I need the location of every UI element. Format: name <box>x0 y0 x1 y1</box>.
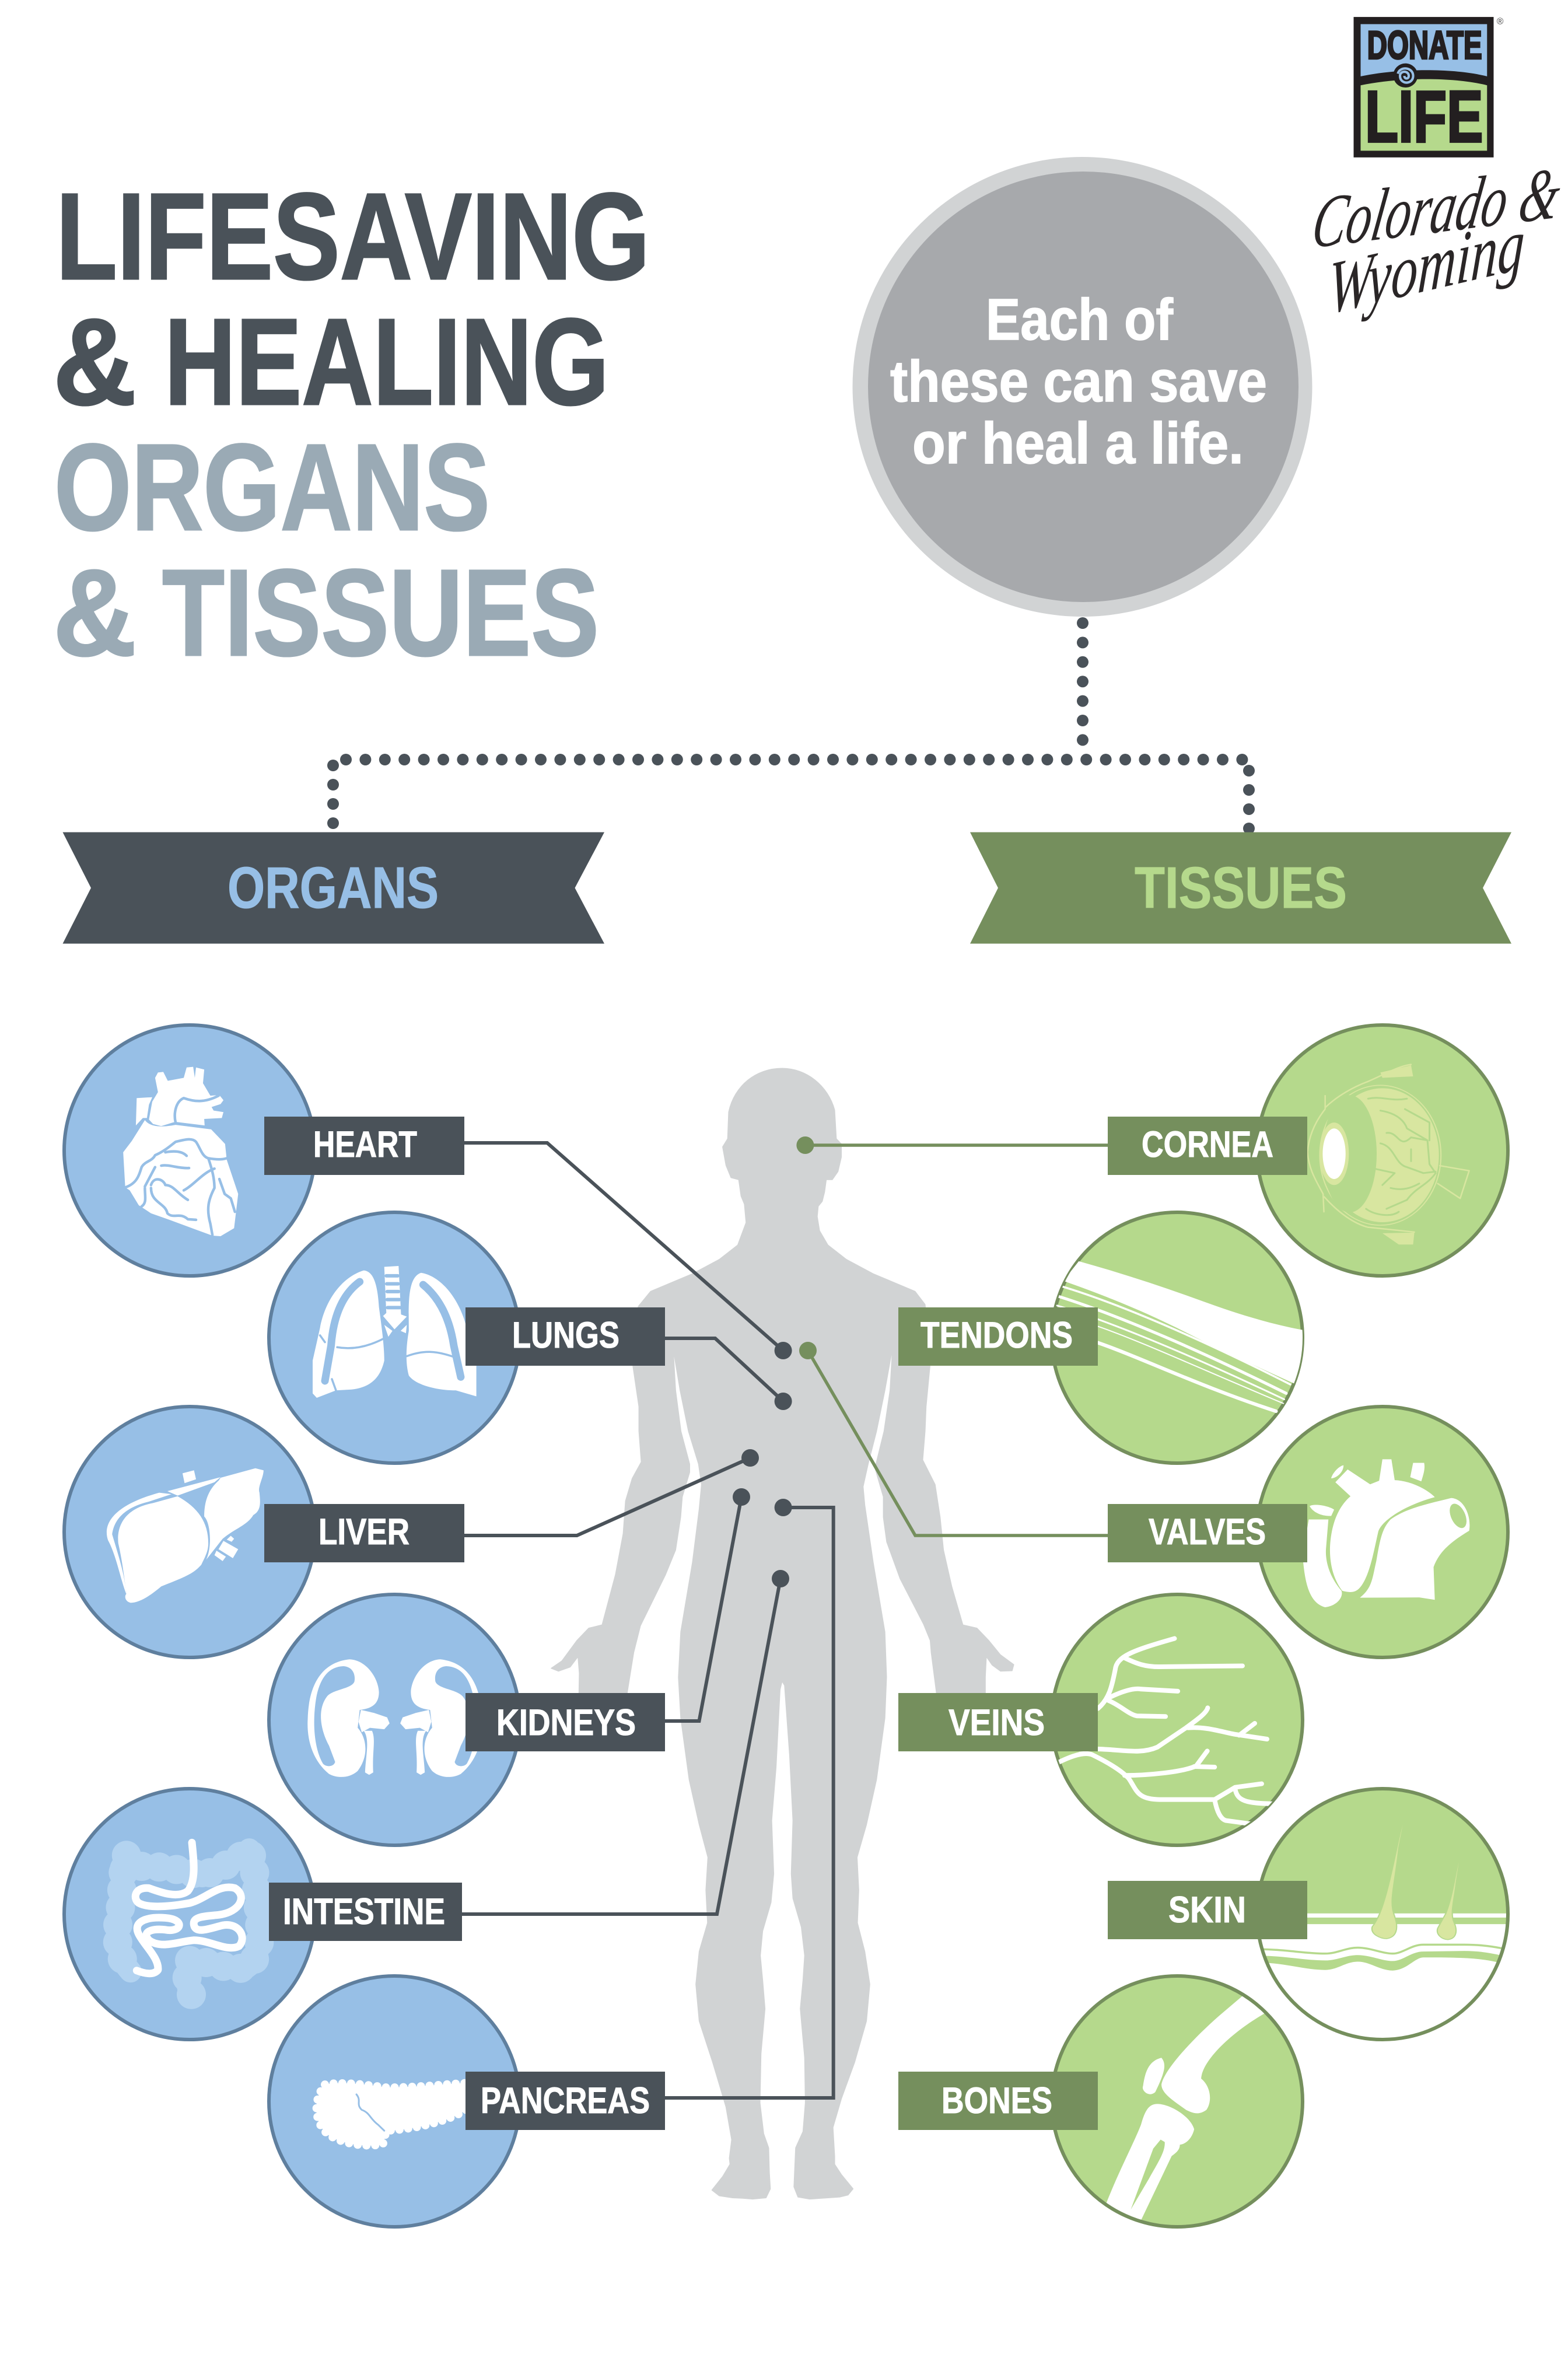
banner: organs: ORGANS <box>228 855 439 921</box>
label: tendons: TENDONS <box>921 1315 1073 1356</box>
label: skin <box>1108 1881 1307 1939</box>
title <box>53 167 650 681</box>
label: lungs <box>466 1307 665 1366</box>
callout circle: Each of <box>986 287 1174 352</box>
label: kidneys <box>466 1693 665 1751</box>
icon: heart <box>123 1067 238 1236</box>
body marker dots <box>733 1136 817 1587</box>
banner: tissues <box>970 832 1511 944</box>
title: HEALING <box>164 293 609 431</box>
title: & <box>53 544 136 681</box>
title: ORGANS <box>54 418 490 556</box>
panel: kidneys <box>269 1594 520 1845</box>
label: liver: LIVER <box>318 1512 410 1552</box>
panel: bones <box>1052 1976 1303 2229</box>
icon: lungs <box>313 1266 477 1398</box>
icon: veins <box>1059 1639 1276 1824</box>
label: valves: VALVES <box>1149 1512 1266 1552</box>
label: pancreas: PANCREAS <box>481 2080 650 2121</box>
icon: kidneys <box>307 1659 482 1777</box>
panel: cornea <box>1257 1025 1508 1276</box>
label: veins <box>898 1693 1098 1751</box>
panel: veins <box>1052 1594 1303 1845</box>
icon: skin layers <box>1264 1790 1506 1971</box>
connector lines: organs <box>462 1143 834 2098</box>
dotted connector tree <box>333 623 1249 831</box>
title: TISSUES <box>162 544 599 681</box>
panel: pancreas <box>269 1976 520 2227</box>
callout circle <box>853 157 1312 617</box>
label: intestine <box>269 1883 462 1941</box>
logo: Donate Life: LIFE <box>1365 76 1483 158</box>
label: valves <box>1108 1504 1307 1562</box>
connector lines: tissues <box>805 1145 1108 1535</box>
icon: liver <box>107 1468 264 1603</box>
panel: tendons <box>1052 1212 1303 1463</box>
logo: Donate Life <box>1353 16 1504 158</box>
icon: eye <box>1307 1065 1469 1244</box>
panel: heart <box>64 1025 315 1276</box>
icon: valve <box>1303 1459 1469 1607</box>
callout circle: these can save <box>890 349 1267 414</box>
panel: lungs <box>269 1212 520 1463</box>
panel: liver <box>64 1407 315 1657</box>
body silhouette <box>551 1068 1014 2199</box>
label: veins: VEINS <box>949 1702 1045 1743</box>
label: lungs: LUNGS <box>512 1315 620 1356</box>
banner: tissues: TISSUES <box>1135 855 1347 921</box>
label: kidneys: KIDNEYS <box>496 1702 636 1743</box>
banner: organs <box>63 832 604 944</box>
label: tendons <box>898 1307 1098 1366</box>
icon: tendons <box>1057 1261 1303 1411</box>
panel: intestine <box>64 1789 315 2040</box>
label: liver <box>264 1504 464 1562</box>
label: heart <box>264 1117 464 1175</box>
label: pancreas <box>466 2072 665 2130</box>
label: heart: HEART <box>313 1124 417 1165</box>
logo: Donate Life: ® <box>1497 16 1504 26</box>
logo: Donate Life: DONATE <box>1367 23 1482 67</box>
title: LIFESAVING <box>56 167 650 305</box>
panel: valves <box>1257 1407 1508 1657</box>
label: bones <box>898 2072 1098 2130</box>
icon: intestine <box>117 1842 260 1995</box>
label: intestine: INTESTINE <box>283 1891 445 1932</box>
label: cornea: CORNEA <box>1142 1124 1273 1165</box>
icon: pancreas <box>317 2083 466 2146</box>
title: & <box>53 293 136 431</box>
label: bones: BONES <box>942 2080 1052 2121</box>
label: cornea <box>1108 1117 1307 1175</box>
label: skin: SKIN <box>1168 1890 1246 1930</box>
icon: knee bones <box>1102 1995 1268 2229</box>
panel: skin <box>1258 1787 1510 2041</box>
callout circle: or heal a life. <box>912 411 1244 476</box>
